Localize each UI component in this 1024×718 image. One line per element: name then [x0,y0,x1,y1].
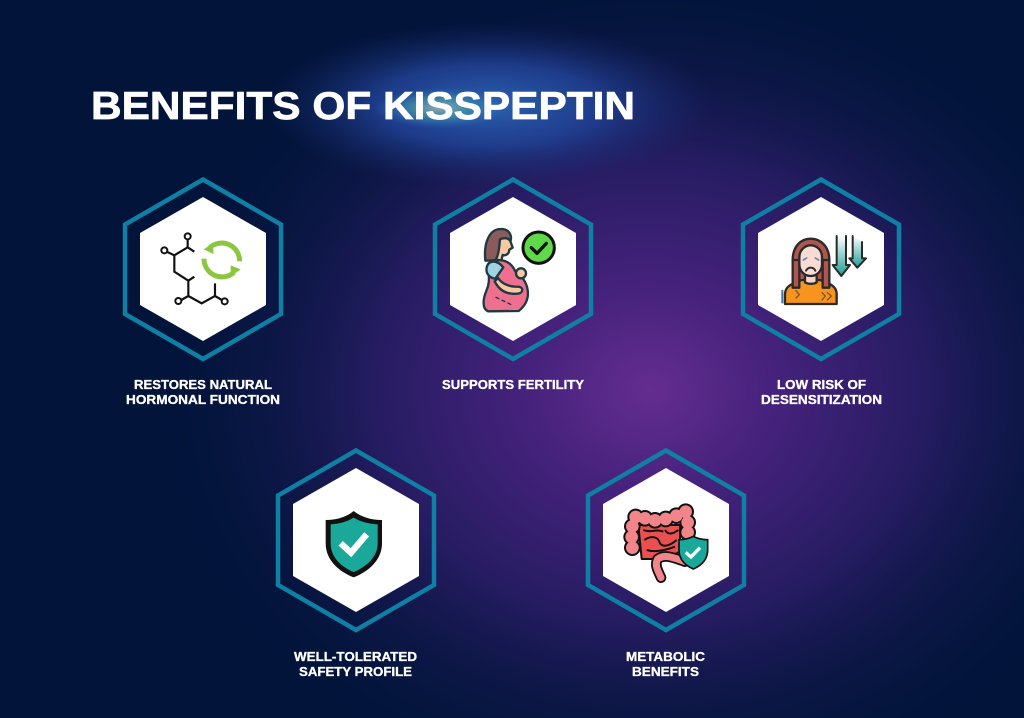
panel: metabolic benefits [588,450,744,679]
hexagon frame [588,450,744,630]
label: METABOLIC [626,650,705,664]
hexagon frame [743,180,899,359]
label [626,650,705,679]
hexagon frame [435,180,591,359]
label [761,378,882,407]
label: RESTORES NATURAL [134,378,272,392]
icon: pregnant woman with check [484,229,554,311]
white hexagon [293,468,419,612]
panel: well-tolerated safety profile [278,450,434,679]
label: WELL-TOLERATED [294,650,417,664]
icon: sad woman with down arrows [782,236,866,304]
white hexagon [140,197,266,341]
panel: restores natural hormonal function [125,180,281,407]
icon: shield with check [326,511,382,577]
label: LOW RISK OF [777,378,866,392]
hexagon frame [125,180,281,359]
title: BENEFITS OF KISSPEPTIN [91,85,635,128]
white hexagon [603,468,729,612]
label: SAFETY PROFILE [299,665,412,679]
icon: intestines with shield [623,503,708,578]
white hexagon [450,197,576,341]
panel: supports fertility [435,180,591,392]
label: HORMONAL FUNCTION [126,393,280,407]
icon: molecule with green cycle arrows [161,233,241,304]
label: BENEFITS [632,665,699,679]
label: DESENSITIZATION [761,393,882,407]
white hexagon [758,197,884,341]
label: SUPPORTS FERTILITY [442,378,585,392]
label [294,650,417,679]
hexagon frame [278,450,434,630]
label [126,378,280,407]
panel: low risk of desensitization [743,180,899,407]
